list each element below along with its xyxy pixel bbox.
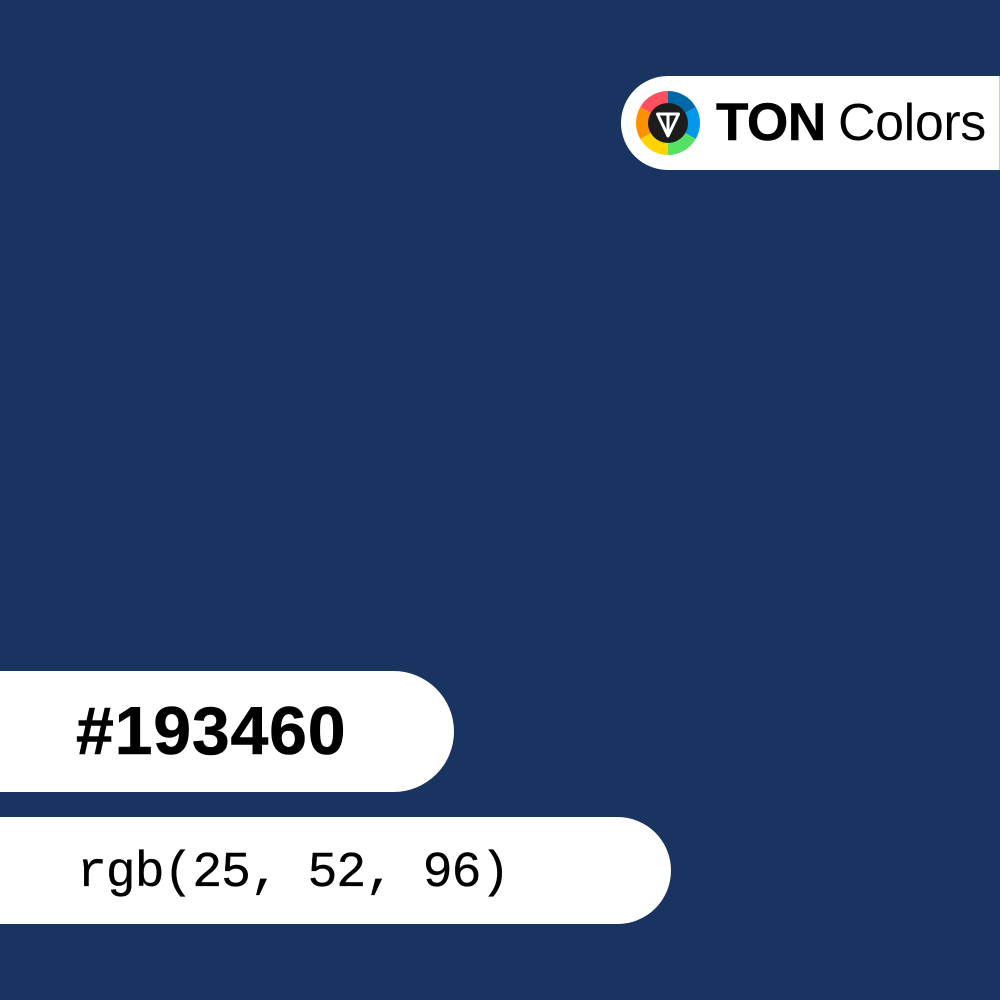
hex code pill — [0, 671, 454, 792]
logo text: Colors: Colors — [838, 94, 986, 152]
hex code text: #193460 — [76, 693, 346, 769]
rgb value text: rgb(25, 52, 96) — [77, 845, 509, 902]
badge edge — [999, 76, 1000, 170]
logo badge — [621, 76, 1000, 170]
rgb value pill — [0, 817, 671, 924]
logo text: TON: TON — [716, 93, 826, 152]
icon: TON colour wheel — [636, 91, 700, 155]
